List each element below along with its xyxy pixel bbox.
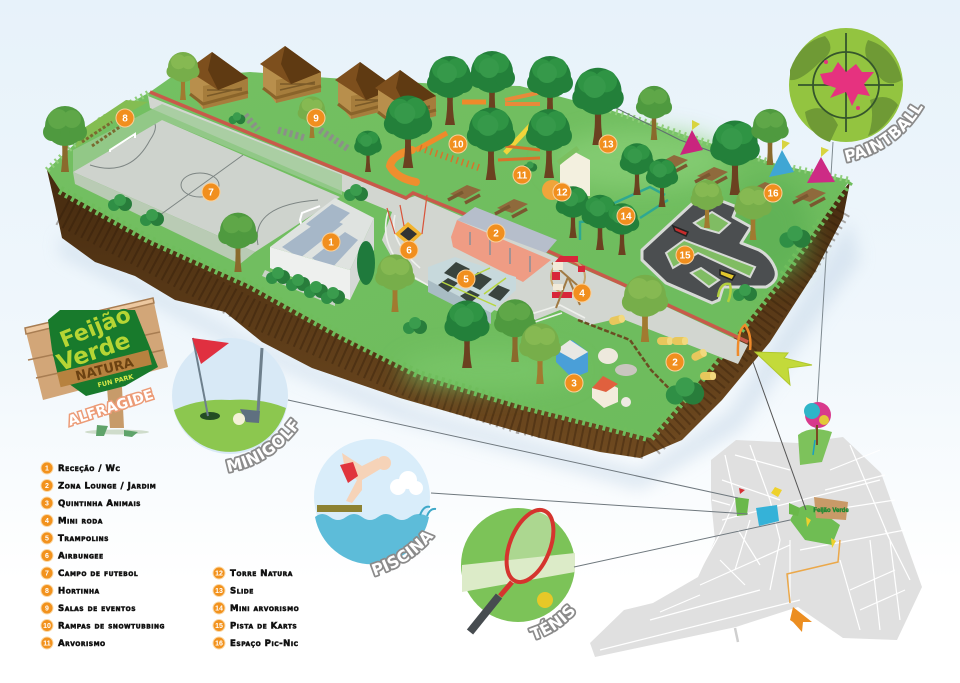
legend item 2: Zona Lounge / Jardim [58,482,156,492]
marker 16 [764,184,782,202]
marker 4: 4 [579,288,585,300]
shrubs [108,112,811,334]
ferris wheel [551,256,585,308]
picnic tables [448,155,826,217]
legend item 3: 3 [45,500,49,508]
legend [41,462,299,649]
marker 6 [400,241,418,259]
marker 3 [565,374,583,392]
island shadow [60,220,860,490]
legend item 4: Mini roda [58,516,103,526]
marker 2 lounge [487,224,505,242]
grass fringe [60,180,850,438]
legend item 5: 5 [45,536,49,542]
reception building [262,198,374,306]
legend item 8 [41,584,100,596]
map stars [771,487,836,548]
legend item 7 [41,567,138,579]
grass tone patches [400,130,810,390]
marker 15: 15 [679,250,691,262]
marker 3: 3 [571,378,577,390]
marker 9: 9 [313,114,319,124]
marker 10 [449,135,467,153]
map minigolf [735,497,749,516]
legend item 10: Rampas de snowtubbing [58,622,165,632]
cabins [187,46,436,127]
marker 12: 12 [556,188,568,198]
marker 5 [457,270,475,288]
trampolines [428,257,516,324]
legend item 16 [213,637,299,649]
farm area [556,314,716,408]
map road stub [735,628,738,642]
legend item 4: 4 [45,518,49,525]
marker 10: 10 [452,140,464,150]
plaza kerbs [386,212,585,322]
marker 8: 8 [122,114,128,124]
legend item 12: Torre Natura [230,569,293,579]
legend item 10: 10 [43,623,51,630]
legend item 2: 2 [45,483,49,490]
legend item 14: Mini arvorismo [230,604,299,614]
legend item 1: Receção / Wc [58,464,120,474]
red kart [673,226,688,236]
legend item 5: Trampolins [58,534,109,544]
zip line [600,100,735,160]
locator street map [590,402,922,657]
legend item 15: Pista de Karts [230,622,297,632]
go-kart track [642,200,776,303]
legend item 8: 8 [45,588,49,595]
sign planks [25,298,168,400]
orange hoop [738,325,750,356]
football field [73,104,342,264]
legend item 4 [41,514,103,526]
marker 9 [307,109,325,127]
slide tower [542,148,590,200]
marker 14 [617,207,635,225]
legend item 3 [41,497,141,509]
legend item 1: 1 [45,466,49,472]
marker 5: 5 [463,274,469,286]
map streets [600,445,910,650]
map logo text: Feijão Verde [813,508,849,514]
legend item 14: 14 [215,606,223,612]
marker 1: 1 [328,238,334,248]
stepping stones [245,115,350,150]
map flower tree [798,402,832,465]
marker 7: 7 [208,188,214,198]
logo banner [57,350,152,389]
map land [590,437,922,657]
grass top [47,72,850,438]
lounge zone [451,207,557,282]
sign leaves [96,425,138,437]
logo background [48,310,158,396]
logo name: Feijão [57,303,135,353]
legend item 15: 15 [215,623,223,630]
marker 11 [513,166,531,184]
sign grass [85,430,149,434]
marker 4 [573,284,591,302]
floating island map [43,46,850,458]
tents [680,120,835,183]
lime arch [718,284,731,302]
legend item 7: Campo de futebol [58,569,138,579]
icon: paintball circle [789,28,903,142]
map park area [790,505,840,545]
marker 6: 6 [406,246,412,256]
cypress [357,241,375,285]
legend item 8: Hortinha [58,586,100,596]
legend item 12: 12 [215,570,223,578]
map tennis [789,503,800,516]
legend item 15 [213,620,297,632]
marker 11: 11 [517,170,528,182]
cliff [47,170,850,458]
icon: lime arrow [755,352,812,385]
legend item 6 [41,550,104,562]
marker 2 lounge: 2 [493,228,499,240]
map flag [739,488,745,494]
logo location: ALFRAGIDE [66,387,155,430]
map entrance arrow [790,607,812,632]
snowtubing ramps [390,92,542,182]
legend item 12 [213,567,293,579]
vegetable garden [76,100,148,148]
label: piscina: PISCINA [370,530,436,578]
legend item 9: 9 [45,606,49,612]
yellow kart [720,270,735,280]
map route [787,540,840,603]
logo banner: NATURA [74,356,135,384]
legend item 3: Quintinha Animais [58,499,141,509]
legend item 11 [41,637,106,649]
label: minigolf: MINIGOLF [225,416,299,474]
icon: piscina circle [314,439,436,564]
legend item 16: 16 [215,640,223,648]
legend item 9 [41,602,136,614]
number markers on the map [116,109,782,392]
legend item 6: Airbungee [58,552,104,562]
logo sign: Verde [54,328,134,377]
mini arvorismo [580,187,668,240]
legend item 1 [41,462,120,474]
legend item 13: Slide [230,586,254,596]
legend item 5 [41,532,109,544]
marker 13: 13 [602,140,614,150]
icon: tennis circle [461,503,575,632]
icon: minigolf circle [172,338,288,454]
marker 8 [116,109,134,127]
legend item 14 [213,602,299,614]
connector lines behind island [815,142,833,440]
legend item 13 [213,584,254,596]
sign post [107,387,124,428]
logo sign [25,298,168,437]
marker 16: 16 [767,188,779,200]
marker 1 [322,233,340,251]
road and plaza [148,96,748,364]
legend item 6: 6 [45,553,49,560]
legend item 16: Espaço Pic-Nic [230,639,299,649]
trees [43,51,789,384]
map pool [756,505,779,526]
red wall [150,92,748,342]
marker 14: 14 [620,212,632,222]
marker 2 garden: 2 [672,358,678,368]
marker 15 [676,246,694,264]
label: paintball: PAINTBALL [842,104,925,164]
legend item 7: 7 [45,570,49,578]
legend item 9: Salas de eventos [58,604,136,614]
marker 2 garden [666,353,684,371]
logo fun park: FUN PARK [97,373,135,389]
airbungee [387,195,427,246]
marker 13 [599,135,617,153]
map logo [814,497,848,520]
legend item 11: Arvorismo [58,639,106,649]
marker 7 [202,183,220,201]
label: tenis: TÉNIS [527,603,576,640]
legend item 11: 11 [43,640,51,648]
connector lines over map [288,362,806,567]
marker 12 [553,183,571,201]
legend item 13: 13 [215,588,223,595]
